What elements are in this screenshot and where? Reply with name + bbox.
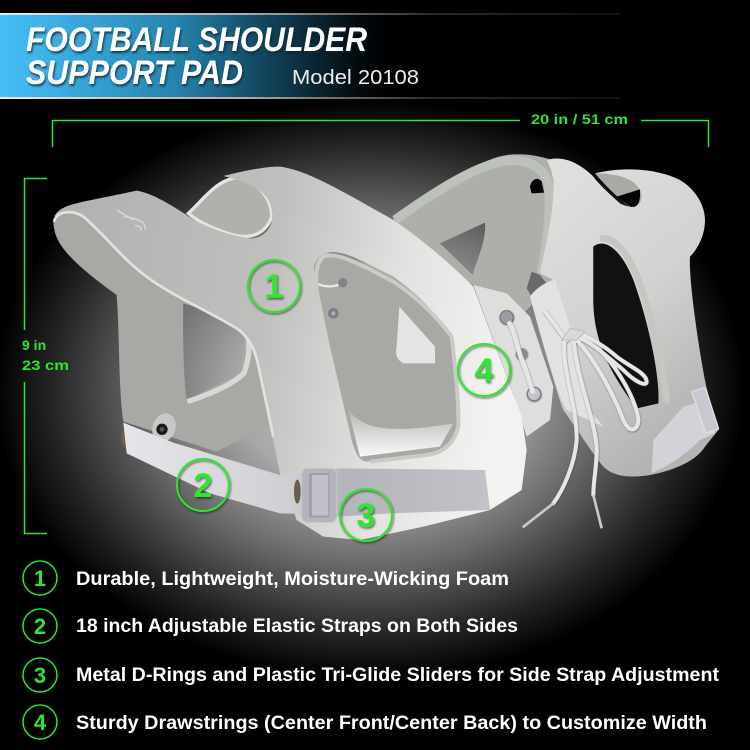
- feature 4: [23, 705, 707, 739]
- foam shell: [54, 167, 527, 540]
- height dimension bracket: 23 cm: [22, 357, 69, 373]
- feature 3: Metal D-Rings and Plastic Tri-Glide Sliders for Side Strap Adjustment: [76, 665, 720, 686]
- side strap and slider: [652, 400, 715, 473]
- lacing tab: [473, 285, 553, 437]
- feature 3: 3: [34, 663, 46, 688]
- feature 2: [23, 609, 518, 643]
- elastic strap: [123, 423, 490, 517]
- rivet: [148, 410, 180, 445]
- lacing tab: [530, 280, 603, 427]
- back shell rim: [395, 160, 549, 273]
- callout 2: [177, 459, 229, 511]
- feature 1: Durable, Lightweight, Moisture-Wicking Foam: [76, 569, 509, 590]
- callout 3: [340, 489, 392, 541]
- callout 1: [248, 260, 300, 312]
- logo emboss: [117, 210, 145, 230]
- tri-glide slider: [302, 468, 337, 522]
- height dimension bracket: [22, 178, 69, 534]
- arm opening: [593, 244, 658, 408]
- title: [26, 21, 367, 92]
- height dimension bracket: 9 in: [22, 337, 46, 353]
- shoulder pad: back section: [390, 154, 719, 528]
- callout 2: 2: [194, 467, 212, 505]
- model number: Model 20108: [292, 67, 419, 89]
- shoulder pad: front section: [53, 167, 553, 540]
- window contents: [307, 247, 463, 467]
- inner rim: [187, 337, 249, 402]
- feature 4: 4: [34, 710, 47, 735]
- d-ring: [294, 480, 301, 504]
- front eyelets and lace: [500, 311, 541, 401]
- width dimension bracket: 20 in / 51 cm: [531, 111, 628, 127]
- neck notch: [595, 173, 642, 207]
- inner back pad: [53, 207, 280, 452]
- lace tips: [523, 495, 602, 528]
- title: SUPPORT PAD: [26, 54, 243, 92]
- back shell body: [530, 159, 718, 477]
- feature 4: Sturdy Drawstrings (Center Front/Center Back) to Customize Width: [76, 713, 707, 734]
- callout 3: 3: [357, 497, 375, 535]
- shell lower edge highlight: [54, 212, 273, 437]
- title: FOOTBALL SHOULDER: [26, 21, 367, 59]
- callout 4: 4: [475, 352, 494, 390]
- feature 2: 18 inch Adjustable Elastic Straps on Both Sides: [76, 616, 518, 637]
- feature 1: 1: [34, 566, 46, 591]
- drawstring bow: [545, 312, 647, 503]
- feature 3: [23, 658, 720, 692]
- window rim: [316, 255, 458, 462]
- feature 2: 2: [34, 614, 46, 639]
- feature 1: [23, 561, 509, 595]
- inner back shell: [390, 154, 607, 313]
- width dimension bracket: [52, 111, 708, 147]
- dark gap behind lacing: [527, 272, 547, 297]
- callout 4: [458, 344, 510, 396]
- callout 1: 1: [265, 268, 283, 306]
- title banner: [0, 13, 620, 99]
- neck notch: [188, 177, 272, 236]
